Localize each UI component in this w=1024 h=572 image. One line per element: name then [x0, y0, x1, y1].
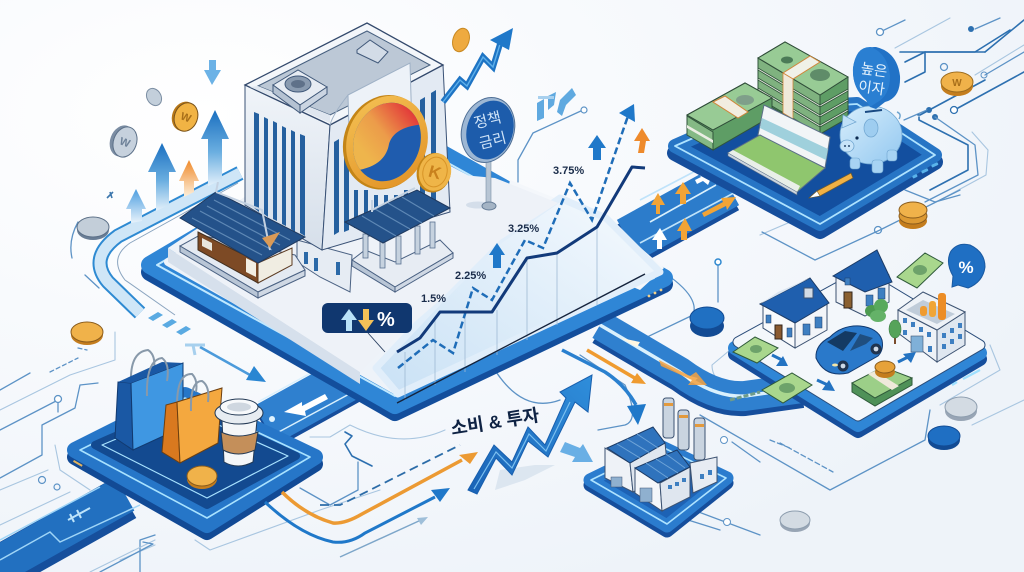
hanok: right: [345, 188, 453, 292]
icon: piggy bank: [840, 106, 902, 173]
icon: tree: [889, 320, 901, 344]
road: shopping connector: [258, 358, 353, 434]
front tower panel: [348, 63, 412, 165]
chart: policy rate: 2.25%: [455, 270, 486, 282]
window stripes: [254, 90, 436, 236]
glass chart surface: [376, 198, 660, 394]
road: right connector: [600, 325, 802, 401]
callout label: [857, 60, 888, 99]
arrows: consumption flow: [265, 445, 478, 557]
icons: small flow arrows: [772, 352, 916, 391]
roof box small: [357, 40, 388, 63]
road: bottom-left connector: [0, 486, 140, 572]
data labels: 1.5%: [421, 293, 446, 305]
roof: [245, 23, 443, 125]
icon: office building: [898, 292, 965, 362]
chart arrows: [588, 135, 606, 160]
badge: rate up and down: [322, 303, 412, 352]
icon: cash stack with coins: [852, 361, 912, 406]
icon: small money stack: [687, 83, 772, 150]
icons: faint small arrows: [537, 88, 576, 121]
sign: policy rate: [453, 91, 523, 210]
road: top-right connector: [628, 166, 745, 249]
platform indicator dots: [648, 289, 662, 297]
coins: right top: [899, 72, 973, 229]
coins: right top: W: [952, 78, 962, 89]
hanok: left: [180, 182, 305, 298]
sign label: [472, 109, 508, 153]
building: [245, 23, 450, 292]
icon: orange shopping bag: [162, 374, 222, 463]
left wall: [245, 85, 330, 250]
icon: banknotes: [733, 253, 943, 403]
chart: policy rate: 3.25%: [508, 223, 539, 235]
icon: blue shopping bag: [115, 350, 183, 450]
icon: coffee cup: [215, 399, 263, 466]
arrows: rising left: [107, 60, 229, 223]
chart drop lines: [405, 227, 597, 400]
icon: K coin: K: [426, 162, 444, 183]
right wall: [322, 65, 450, 250]
panel: central platform: [150, 124, 664, 412]
panel: factory platform: [590, 446, 727, 531]
sign label: 정책: [472, 109, 503, 132]
label: consumption and investment: 소비 & 투자: [449, 405, 541, 439]
sign label: 금리: [477, 130, 508, 153]
icon: car: [816, 326, 882, 374]
outer light band around the central platform: [100, 173, 240, 335]
road detail on platform edge: [730, 392, 760, 400]
icon: percent bubble: %: [958, 258, 974, 277]
arrow: rising zigzag: [468, 375, 592, 494]
icon: percent bubble: [948, 244, 985, 288]
plinth top: [168, 160, 558, 372]
blob hiding the upper right rim: [500, 180, 664, 290]
coins: left: W: [118, 136, 132, 151]
coins: right lower: [690, 307, 977, 532]
coins: left: W: [179, 111, 193, 126]
panel: shopping platform: [73, 395, 315, 532]
icon: orange and white arrows on the road: [651, 171, 736, 249]
chart: policy rate: 3.75%: [553, 165, 584, 177]
icon: passbook: [728, 105, 830, 195]
circuit lines: top right: [760, 18, 1024, 260]
panel: real-estate platform: [735, 274, 980, 431]
icon: coin on shopping platform: [187, 466, 217, 489]
lower block: [297, 240, 352, 292]
coins: left: [71, 26, 472, 345]
icon: house two: [833, 250, 892, 322]
icon: pencil: [809, 173, 853, 198]
roof vent box: [273, 70, 327, 113]
chimneys: [663, 398, 705, 460]
arrows: left flow: [185, 345, 266, 382]
solid rate line: [397, 167, 645, 352]
baseline: [397, 274, 645, 403]
icon: house one: [760, 278, 829, 348]
callout label: 높은: [860, 60, 888, 81]
icon: large money stack: [758, 42, 848, 134]
arrow: top zigzag: [443, 28, 513, 102]
dashed rate line: [398, 116, 628, 368]
callout label: 이자: [857, 78, 886, 99]
panel: savings platform: [675, 104, 939, 231]
chart: policy rate: [397, 104, 650, 403]
plinth side: [168, 248, 360, 384]
icon: K coin: [412, 149, 455, 196]
badge: rate up and down: %: [377, 309, 395, 331]
icon: Korean emblem coin: [342, 95, 428, 190]
callout: high interest: [853, 47, 900, 109]
arrows: flow to factory: [560, 350, 707, 462]
icon: factory: [605, 398, 717, 511]
